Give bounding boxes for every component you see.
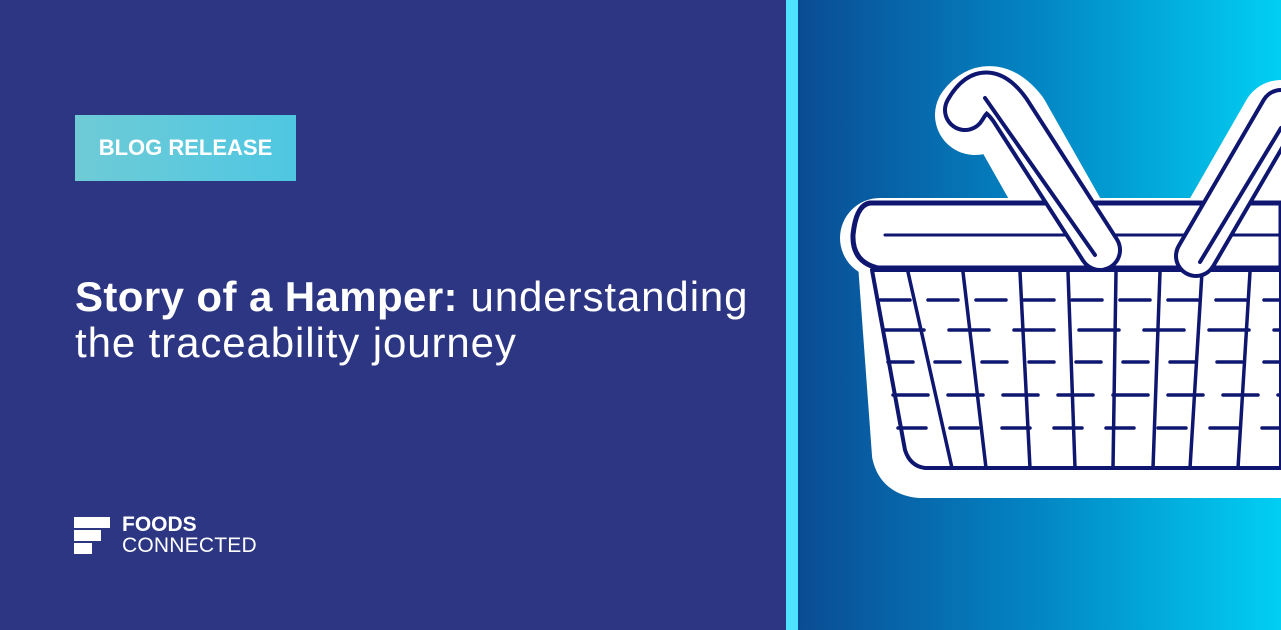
logo: foods connected <box>74 513 257 557</box>
panel: left background <box>0 0 786 630</box>
title <box>75 273 748 366</box>
body <box>872 270 1281 468</box>
panel: right gradient background <box>798 0 1281 630</box>
logo: foods connected: FOODS <box>122 513 197 536</box>
right handle <box>1196 110 1281 256</box>
halo <box>880 106 1281 270</box>
rim <box>853 203 1281 268</box>
logo: foods connected: CONNECTED <box>122 534 257 557</box>
left handle <box>965 92 1100 250</box>
badge: blog release <box>75 115 296 181</box>
title: Story of a Hamper: understanding <box>75 273 748 320</box>
badge: blog release: BLOG RELEASE <box>99 135 272 160</box>
title: the traceability journey <box>75 319 517 366</box>
